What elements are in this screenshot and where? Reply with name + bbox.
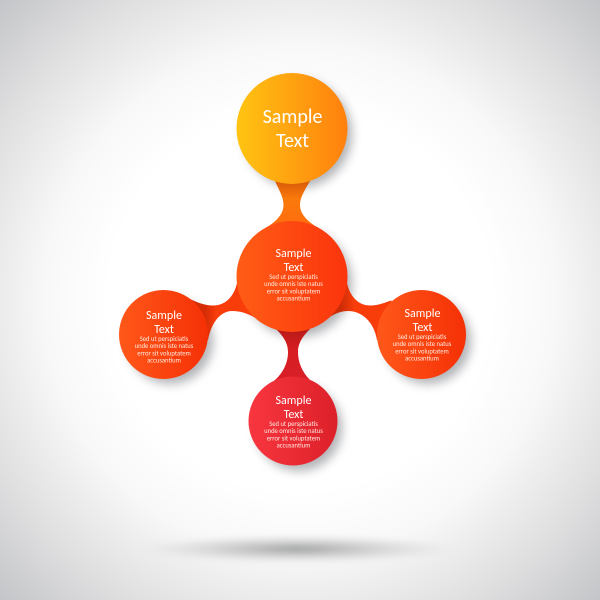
node: bottom: Sed ut perspiciatis (269, 420, 318, 428)
connector: centre to bottom (274, 300, 310, 410)
node: top (236, 73, 348, 184)
node: top: Sample (263, 105, 322, 129)
node: bottom: accusantium (277, 442, 310, 450)
node: bottom: error sit voluptatem (267, 434, 320, 442)
node: bottom: Text (284, 408, 303, 422)
node: centre: Sed ut perspiciatis (269, 273, 318, 281)
circle drop shadows (127, 80, 471, 471)
node: right: Text (413, 321, 432, 335)
node: left: unde omnis iste natus (135, 342, 194, 350)
node: right: Sample (405, 307, 440, 321)
node: right: Sed ut perspiciatis (398, 333, 447, 341)
node: bottom (248, 376, 338, 466)
node: top: Text (276, 129, 309, 153)
connector: centre to right (292, 276, 421, 340)
node: bottom: Sample (276, 394, 311, 408)
node: right: error sit voluptatem (395, 347, 449, 355)
node: bottom: unde omnis iste natus (264, 427, 323, 435)
node: centre (236, 221, 348, 332)
node: left: error sit voluptatem (137, 349, 191, 357)
node: left: Sample (146, 309, 182, 323)
node: centre: Sample (276, 247, 311, 261)
node: centre: unde omnis iste natus (264, 280, 323, 288)
node: centre: accusantium (277, 294, 310, 302)
floor shadow (139, 535, 455, 563)
node: centre: Text (284, 261, 303, 275)
node: right: unde omnis iste natus (393, 340, 452, 348)
node: left: Sed ut perspiciatis (140, 335, 189, 343)
metaball diagram (119, 73, 466, 466)
node: right (377, 290, 466, 379)
node: left: Text (154, 323, 174, 337)
connector: top to centre (262, 150, 322, 260)
node: left (119, 290, 208, 379)
connector: centre to left (163, 276, 292, 340)
node: right: accusantium (405, 354, 439, 362)
node: left: accusantium (147, 356, 181, 364)
node: centre: error sit voluptatem (267, 287, 320, 295)
